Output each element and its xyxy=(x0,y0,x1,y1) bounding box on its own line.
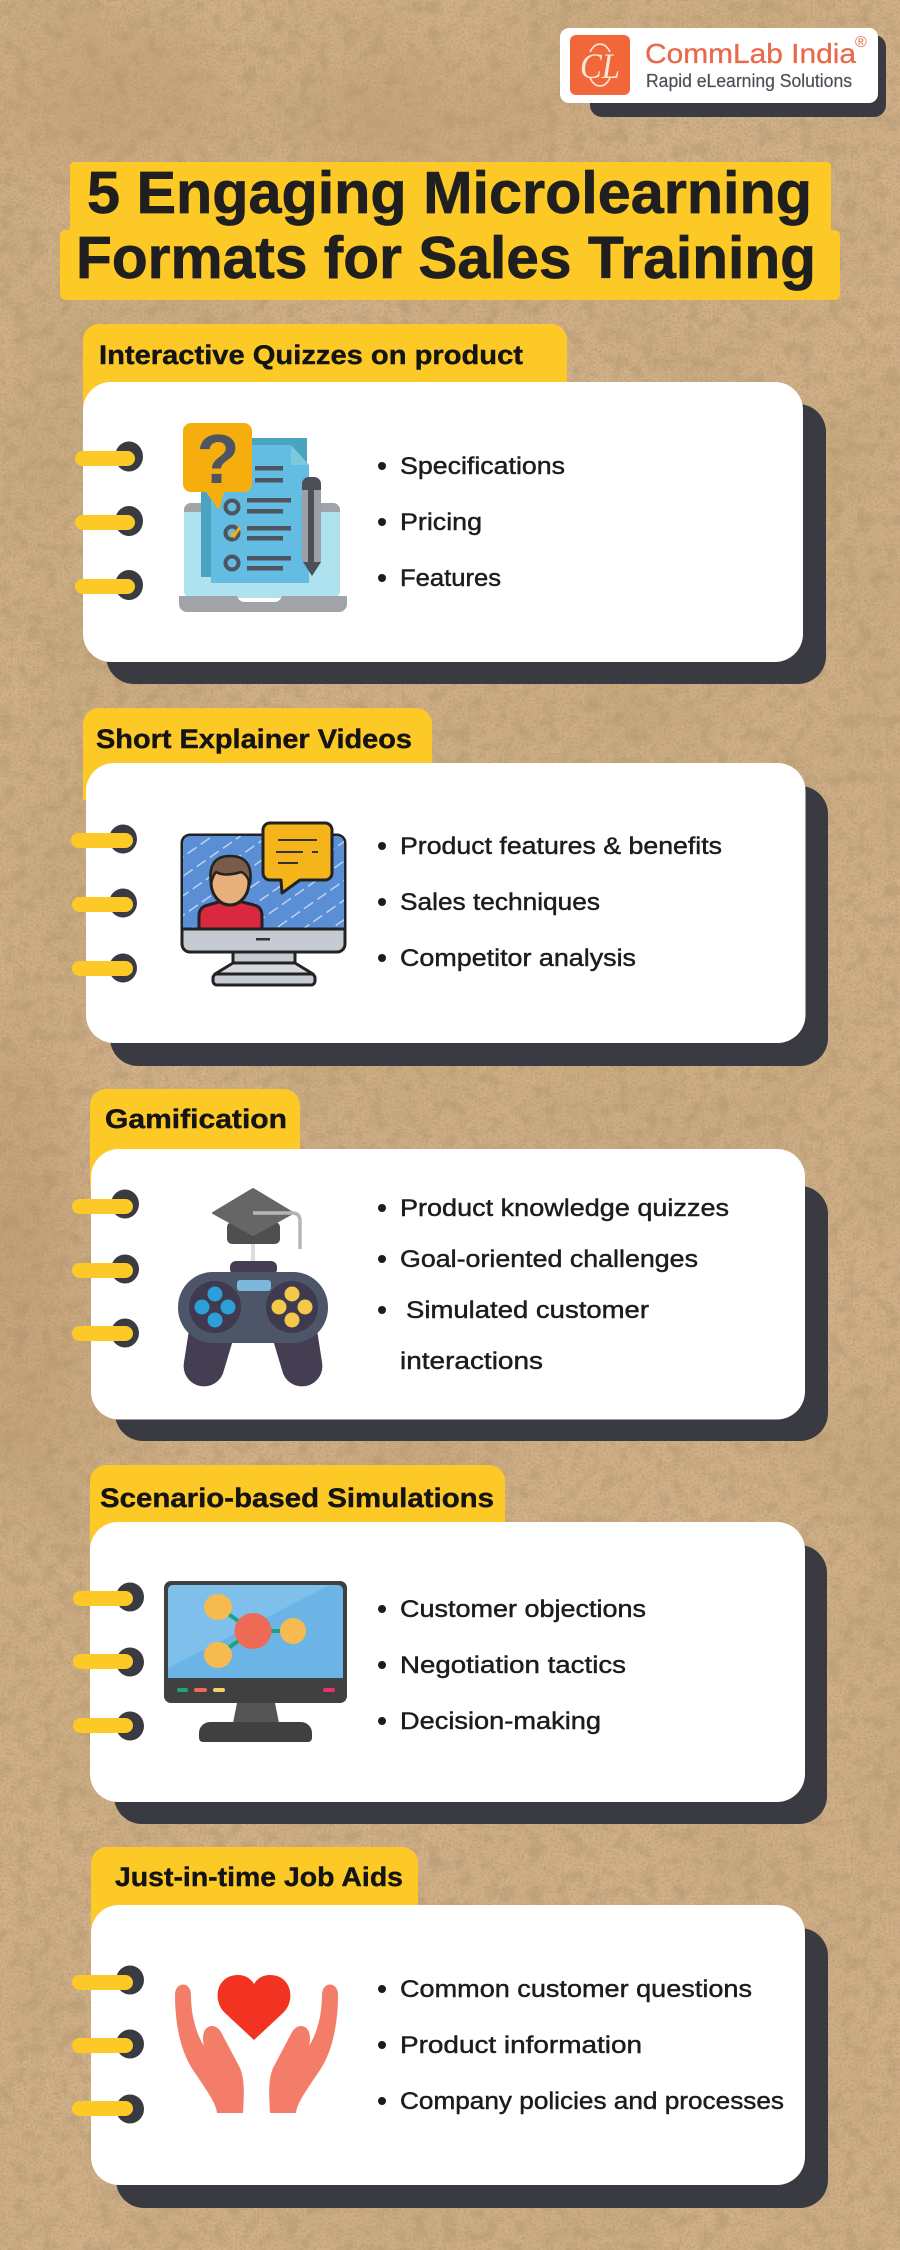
list: Specifications xyxy=(400,453,565,480)
binder rings xyxy=(71,824,137,982)
logo: CommLab India: CL xyxy=(580,46,620,86)
list: Competitor analysis xyxy=(400,945,636,972)
icon: quiz document on laptop xyxy=(179,420,347,612)
binder rings xyxy=(75,442,143,600)
list xyxy=(378,833,722,972)
heading: tab label: Scenario-based Simulations xyxy=(100,1483,494,1513)
logo: CommLab India: Rapid eLearning Solutions xyxy=(646,71,852,91)
list: Decision-making xyxy=(400,1708,601,1735)
panel: Short Explainer Videos xyxy=(71,708,828,1066)
list: Goal-oriented challenges xyxy=(400,1246,698,1273)
list: Features xyxy=(400,565,501,592)
icon: monitor with network diagram xyxy=(164,1581,347,1742)
list xyxy=(378,1976,784,2115)
icon: quiz document on laptop: ? xyxy=(197,420,239,498)
logo: CommLab India xyxy=(560,28,886,117)
list: Simulated customer xyxy=(406,1297,649,1324)
panel: Interactive Quizzes on product xyxy=(75,324,826,684)
list: Sales techniques xyxy=(400,889,600,916)
title: 5 Engaging Microlearning xyxy=(87,160,812,226)
list xyxy=(378,453,565,592)
title: Formats for Sales Training xyxy=(76,225,816,291)
list: interactions xyxy=(400,1348,543,1375)
binder rings xyxy=(73,1582,144,1740)
heading: tab label: Just-in-time Job Aids xyxy=(115,1862,403,1892)
list xyxy=(378,1596,646,1735)
panel: Gamification xyxy=(72,1089,828,1441)
logo: CommLab India: ® xyxy=(855,34,867,51)
heading: tab label: Short Explainer Videos xyxy=(96,724,412,754)
heading: tab label: Interactive Quizzes on product xyxy=(99,340,523,370)
list xyxy=(378,1195,729,1375)
icon: monitor with presenter and speech bubble xyxy=(182,823,345,985)
heading: tab label: Gamification xyxy=(105,1104,287,1134)
panel: Scenario-based Simulations xyxy=(73,1465,827,1824)
binder rings xyxy=(72,1190,139,1348)
list: Customer objections xyxy=(400,1596,646,1623)
binder rings xyxy=(72,1966,144,2124)
panel: Just-in-time Job Aids xyxy=(72,1847,828,2208)
list: Company policies and processes xyxy=(400,2088,784,2115)
list: Product knowledge quizzes xyxy=(400,1195,729,1222)
title xyxy=(60,160,840,300)
icon: game controller with graduation cap xyxy=(178,1189,328,1386)
list: Common customer questions xyxy=(400,1976,752,2003)
list: Negotiation tactics xyxy=(400,1652,626,1679)
list: Product features & benefits xyxy=(400,833,722,860)
logo: CommLab India: CommLab India xyxy=(645,38,856,69)
list: Product information xyxy=(400,2032,642,2059)
icon: hands holding a heart xyxy=(175,1975,338,2113)
list: Pricing xyxy=(400,509,482,536)
